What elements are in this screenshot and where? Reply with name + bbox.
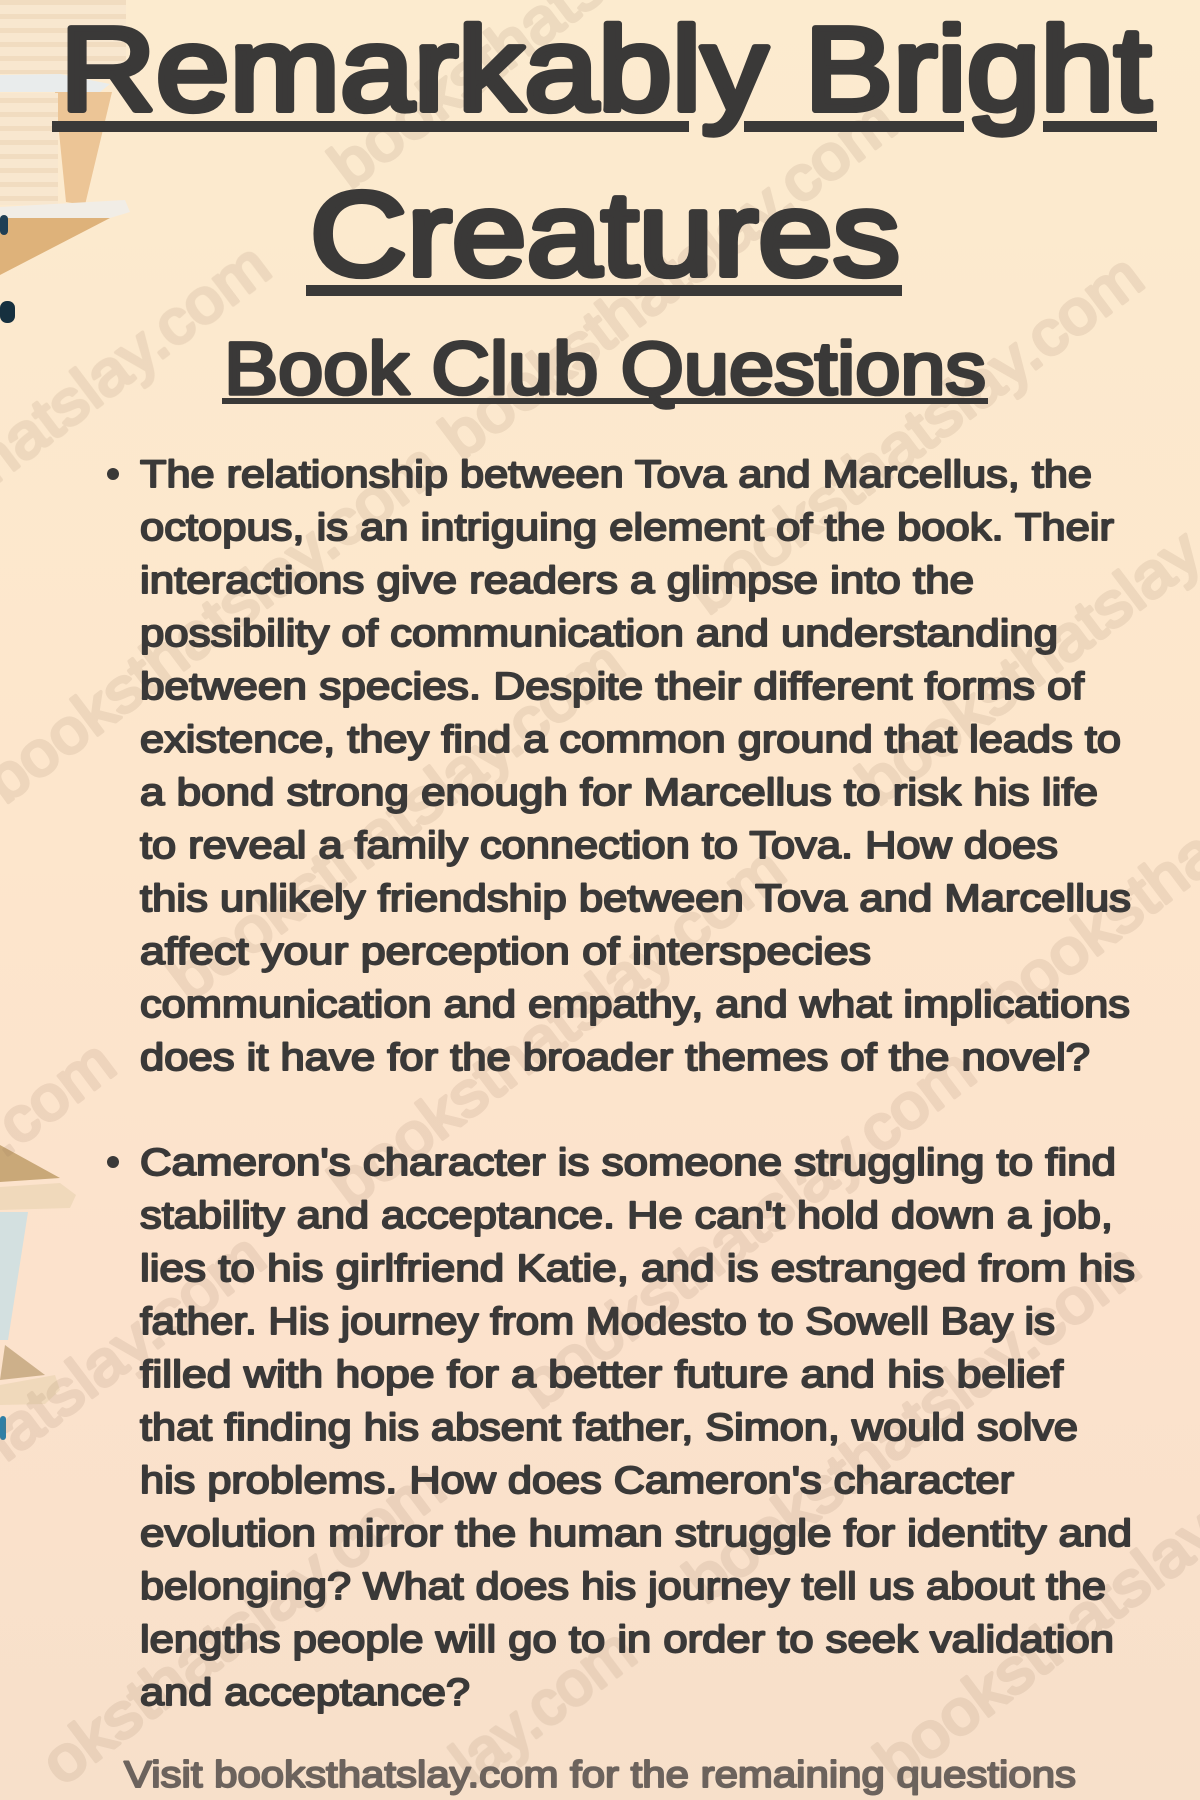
watermarks: booksthatslay.com (672, 1230, 1153, 1616)
question 2: stability and acceptance. He can't hold down a job, (140, 1195, 1113, 1237)
question 2: lies to his girlfriend Katie, and is estranged from his (140, 1248, 1135, 1290)
question 1: existence, they find a common ground that leads to (140, 719, 1121, 761)
question 1: possibility of communication and understanding (140, 613, 1058, 655)
question 2: evolution mirror the human struggle for identity and (140, 1513, 1132, 1555)
question 2: lengths people will go to in order to seek validation (140, 1619, 1114, 1661)
question 1: affect your perception of interspecies (140, 931, 871, 973)
question 1: to reveal a family connection to Tova. How does (140, 825, 1058, 867)
subtitle: Book Club Questions (224, 327, 986, 410)
watermarks: oksthatslay.com (29, 1451, 458, 1798)
watermarks: booksthatslay.com (675, 241, 1156, 627)
question 2: filled with hope for a better future and his belief (140, 1354, 1064, 1396)
illustration: lower book stack (0, 1145, 76, 1440)
question 2: that finding his absent father, Simon, would solve (140, 1407, 1078, 1449)
question 2: and acceptance? (140, 1672, 470, 1714)
illustration: upper book stack (0, 0, 130, 323)
question 1: a bond strong enough for Marcellus to risk his life (140, 772, 1098, 814)
watermarks: booksthatslay.com (507, 1035, 988, 1421)
footer call to action: Visit booksthatslay.com for the remaining questions (124, 1754, 1076, 1795)
watermarks: booksthatslay.com (317, 834, 798, 1220)
title: Remarkably Bright (60, 3, 1151, 136)
question 1: interactions give readers a glimpse into the (140, 560, 974, 602)
question 1: does it have for the broader themes of the novel? (140, 1037, 1090, 1079)
title: Creatures (310, 168, 900, 301)
title (52, 3, 1157, 301)
question 1: this unlikely friendship between Tova and Marcellus (140, 878, 1131, 920)
question 2: belonging? What does his journey tell us about the (140, 1566, 1106, 1608)
question 2: father. His journey from Modesto to Sowell Bay is (140, 1301, 1055, 1343)
question 1: The relationship between Tova and Marcellus, the (140, 454, 1092, 496)
question 2: Cameron's character is someone struggling to find (140, 1142, 1116, 1184)
watermarks: booksthatslay.com (156, 628, 637, 1014)
question 2 (107, 1142, 1135, 1714)
watermarks: lay.com (439, 1616, 648, 1797)
question 1: octopus, is an intriguing element of the book. Their (140, 507, 1114, 549)
question 1: between species. Despite their different forms of (140, 666, 1085, 708)
watermarks: booksthatslay.com (428, 86, 909, 472)
question 1 (107, 454, 1131, 1079)
question 2: his problems. How does Cameron's character (140, 1460, 1014, 1502)
question 1: communication and empathy, and what implications (140, 984, 1130, 1026)
